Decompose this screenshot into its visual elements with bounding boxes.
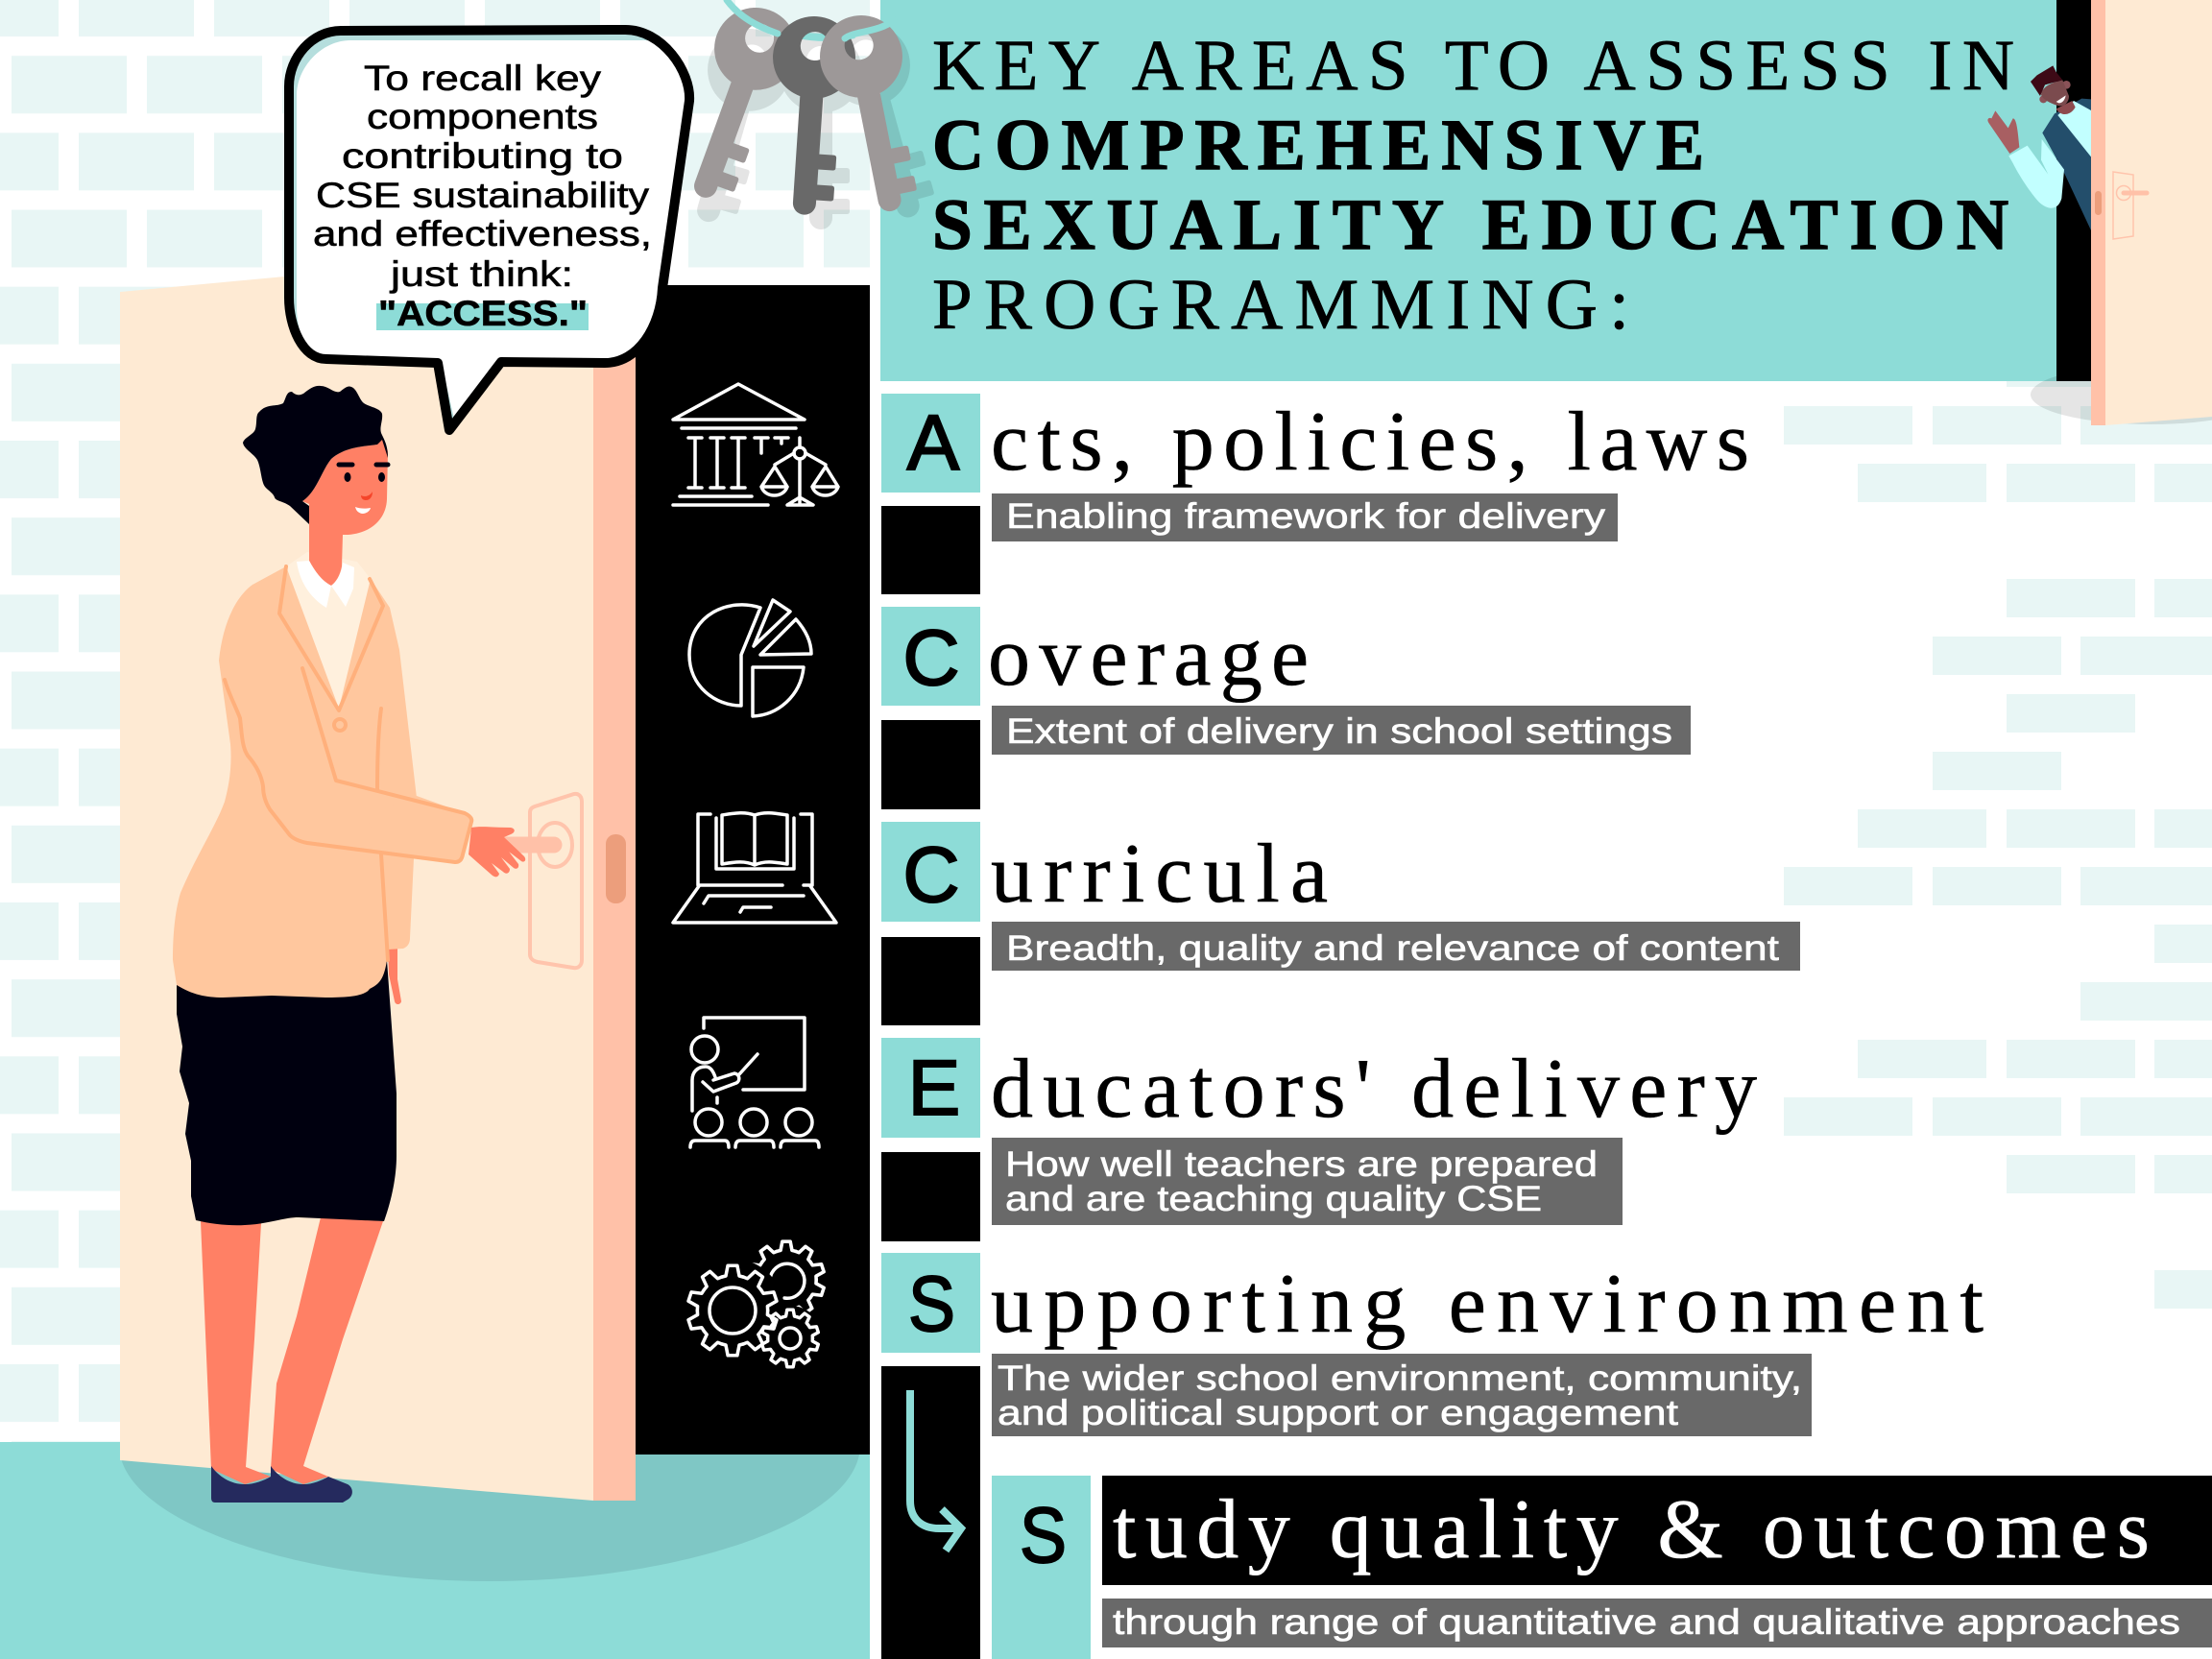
description: Curricula (992, 922, 1800, 971)
bubble text: and effectiveness, (313, 214, 652, 253)
description: Supporting: The wider school environment, community, (998, 1358, 1802, 1398)
title: PROGRAMMING: (932, 265, 1629, 345)
description: Acts: Enabling framework for delivery (1006, 496, 1606, 536)
woman: face and neck (302, 437, 388, 586)
item: Supporting environment: upporting environment (991, 1258, 1984, 1351)
description: Educators: How well teachers are prepared (1005, 1144, 1598, 1184)
item: Study quality & outcomes: tudy quality & outcomes (1113, 1483, 2150, 1576)
title: KEY AREAS TO ASSESS IN (932, 26, 2014, 106)
bubble text: just think: (390, 254, 573, 294)
description: Coverage (992, 706, 1691, 755)
item: Study quality & outcomes: S (1020, 1492, 1067, 1579)
item: Coverage (881, 607, 1691, 809)
key: right (812, 8, 932, 219)
bubble text: contributing to (342, 136, 623, 176)
bubble text (313, 59, 652, 333)
open door (120, 248, 636, 1501)
title: SEXUALITY EDUCATION (932, 185, 2008, 265)
woman: shirt (286, 552, 371, 709)
door shadow top right (2031, 365, 2212, 424)
icon: teacher and students (690, 1018, 819, 1147)
key: centre (762, 13, 858, 217)
woman: skirt (177, 960, 397, 1225)
icon: pie chart (689, 600, 811, 716)
item: Curricula: urricula (991, 828, 1328, 921)
item: Educators' delivery (881, 1038, 1757, 1241)
item: Educators' delivery: E (908, 1045, 960, 1132)
description: Acts (992, 493, 1618, 541)
icon: laptop with book (673, 813, 836, 923)
description: Educators (992, 1138, 1623, 1225)
floor (0, 1442, 870, 1659)
item: Curricula (881, 822, 1800, 1025)
description: Coverage: Extent of delivery in school settings (1006, 711, 1672, 751)
item: Supporting environment (881, 1253, 1984, 1436)
connector bar with arrow (881, 1366, 980, 1659)
title: COMPREHENSIVE (932, 106, 1704, 185)
description: Curricula: Breadth, quality and relevance of content (1006, 928, 1780, 968)
bubble text: components (367, 97, 598, 136)
header panel (880, 0, 2056, 381)
woman: jacket (173, 566, 417, 998)
title (932, 26, 2014, 345)
woman: collar (297, 561, 354, 608)
bubble text: "ACCESS." (378, 294, 588, 333)
item: Acts, policies, laws: A (907, 399, 960, 487)
woman: facial features (339, 465, 388, 514)
door top right (2091, 0, 2212, 425)
description: Study: through range of quantitative and qualitative approaches (1113, 1602, 2180, 1642)
item: Acts, policies, laws: cts, policies, laws (991, 396, 1749, 489)
key ring front segments (727, 0, 894, 38)
description: Supporting: and political support or engagement (998, 1393, 1679, 1432)
key ring behind centre key (797, 35, 854, 37)
illustration: woman at the door (173, 386, 525, 1503)
item: Coverage: overage (988, 611, 1309, 704)
speech bubble (289, 30, 699, 440)
woman: jacket seams (225, 566, 471, 960)
woman: legs (201, 1217, 383, 1484)
black doorway (2056, 0, 2091, 381)
woman: hair (243, 386, 388, 524)
illustration: waving man (1987, 65, 2091, 230)
item: Study quality & outcomes (992, 1476, 2212, 1659)
woman: shoes (211, 1466, 352, 1503)
bubble text: To recall key (364, 59, 602, 98)
key shadows (665, 14, 950, 232)
item: Educators' delivery: ducators' delivery (991, 1043, 1757, 1136)
description: Educators: and are teaching quality CSE (1005, 1179, 1542, 1218)
bubble text: CSE sustainability (316, 176, 650, 215)
item: Supporting environment: S (908, 1261, 955, 1348)
woman: reaching hand (469, 827, 525, 877)
item: Coverage: C (902, 614, 960, 702)
icon: gears (681, 1241, 826, 1371)
item: Curricula: C (902, 831, 960, 919)
icon: courthouse and scales (673, 384, 838, 505)
description: Supporting (992, 1354, 1812, 1436)
key: left (663, 0, 808, 211)
description: Study (1102, 1599, 2212, 1647)
item: Acts, policies, laws (881, 394, 1749, 594)
panel: black icon column (636, 285, 870, 1455)
illustration: hanging keys (663, 0, 950, 232)
woman: hanging hand (388, 946, 401, 1004)
